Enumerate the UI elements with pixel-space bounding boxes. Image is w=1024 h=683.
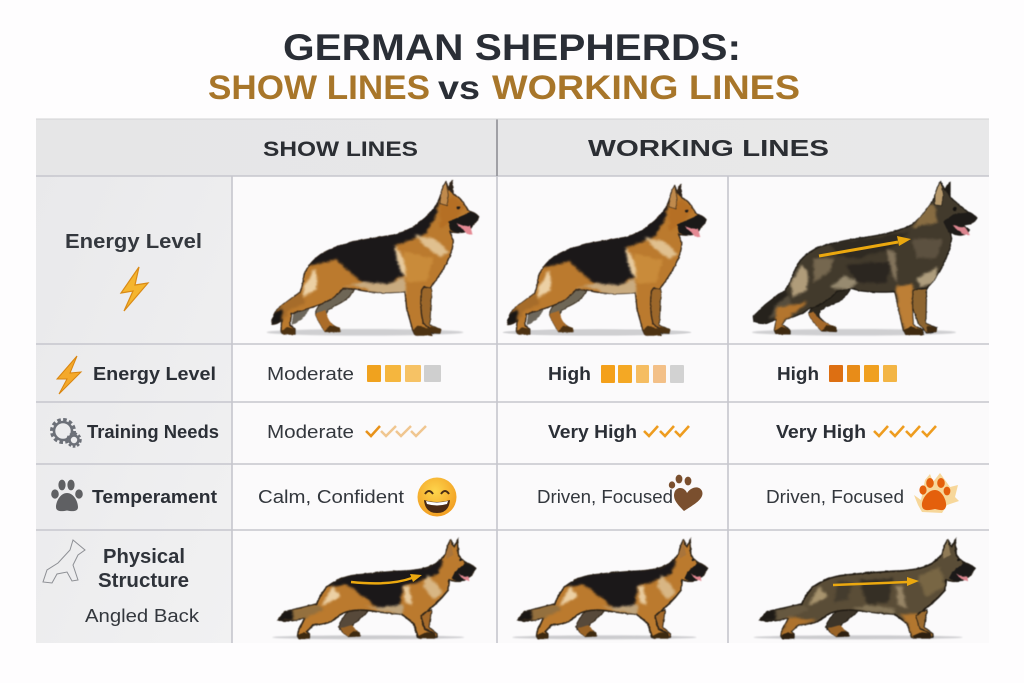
icon: grey paw	[51, 480, 83, 511]
row: physical structure label: Physical	[103, 546, 185, 568]
row: energy level: Moderate	[267, 364, 354, 384]
icon: brown heart paw	[669, 475, 702, 511]
check marks: working lines two	[874, 426, 936, 436]
row: physical structure label	[43, 540, 200, 626]
arrow: angled back on show line	[351, 574, 422, 583]
row: temperament: Calm, Confident	[258, 487, 404, 507]
title: WORKING LINES	[492, 69, 800, 107]
row: temperament: Driven, Focused	[766, 487, 904, 507]
dog: working line, black and tan	[512, 540, 707, 639]
arrow: level back on sable dog	[819, 236, 911, 256]
icon: smiling emoji	[418, 478, 456, 516]
row: physical structure label: Structure	[98, 570, 189, 592]
rating squares: working lines two	[829, 365, 897, 382]
dog: working line, sable	[754, 540, 975, 639]
row: training needs	[52, 420, 936, 446]
check marks: show lines	[366, 426, 426, 436]
icon: flaming orange paw	[914, 473, 959, 513]
arrow: level back on sable working line	[833, 577, 919, 586]
row: temperament: Driven, Focused	[537, 487, 673, 507]
rating squares: working lines one	[601, 365, 684, 383]
icon: dog outline	[43, 540, 85, 583]
row: training needs: Training Needs	[87, 422, 219, 442]
row: temperament: Temperament	[92, 487, 217, 507]
row: energy level: High	[548, 364, 591, 384]
dog: show line, angled back	[272, 540, 476, 639]
row: training needs: Moderate	[267, 422, 354, 442]
title: vs	[438, 69, 480, 106]
row label: energy level with bolt: Energy Level	[65, 231, 202, 253]
check marks: working lines one	[644, 426, 689, 436]
title: GERMAN SHEPHERDS:	[283, 27, 741, 68]
row: training needs: Very High	[548, 422, 637, 442]
comparison table background	[36, 119, 989, 643]
dog: show line standing	[267, 181, 479, 336]
column heading: working lines: WORKING LINES	[588, 135, 829, 161]
title	[208, 27, 800, 107]
column heading: show lines: SHOW LINES	[263, 138, 418, 161]
icon: gears	[52, 420, 80, 446]
title: SHOW LINES	[208, 69, 430, 107]
row: training needs: Very High	[776, 422, 866, 442]
row: energy level	[57, 356, 897, 394]
row label: energy level with bolt	[65, 231, 202, 311]
dog: working line standing, sable	[750, 182, 977, 336]
dog: working line standing, black and tan	[503, 185, 706, 336]
rating squares: show lines	[367, 365, 441, 382]
row: energy level: High	[777, 364, 819, 384]
row: physical structure label: Angled Back	[85, 606, 200, 626]
icon: lightning bolt	[57, 356, 81, 394]
row: temperament	[51, 473, 959, 516]
row: energy level: Energy Level	[93, 364, 216, 384]
